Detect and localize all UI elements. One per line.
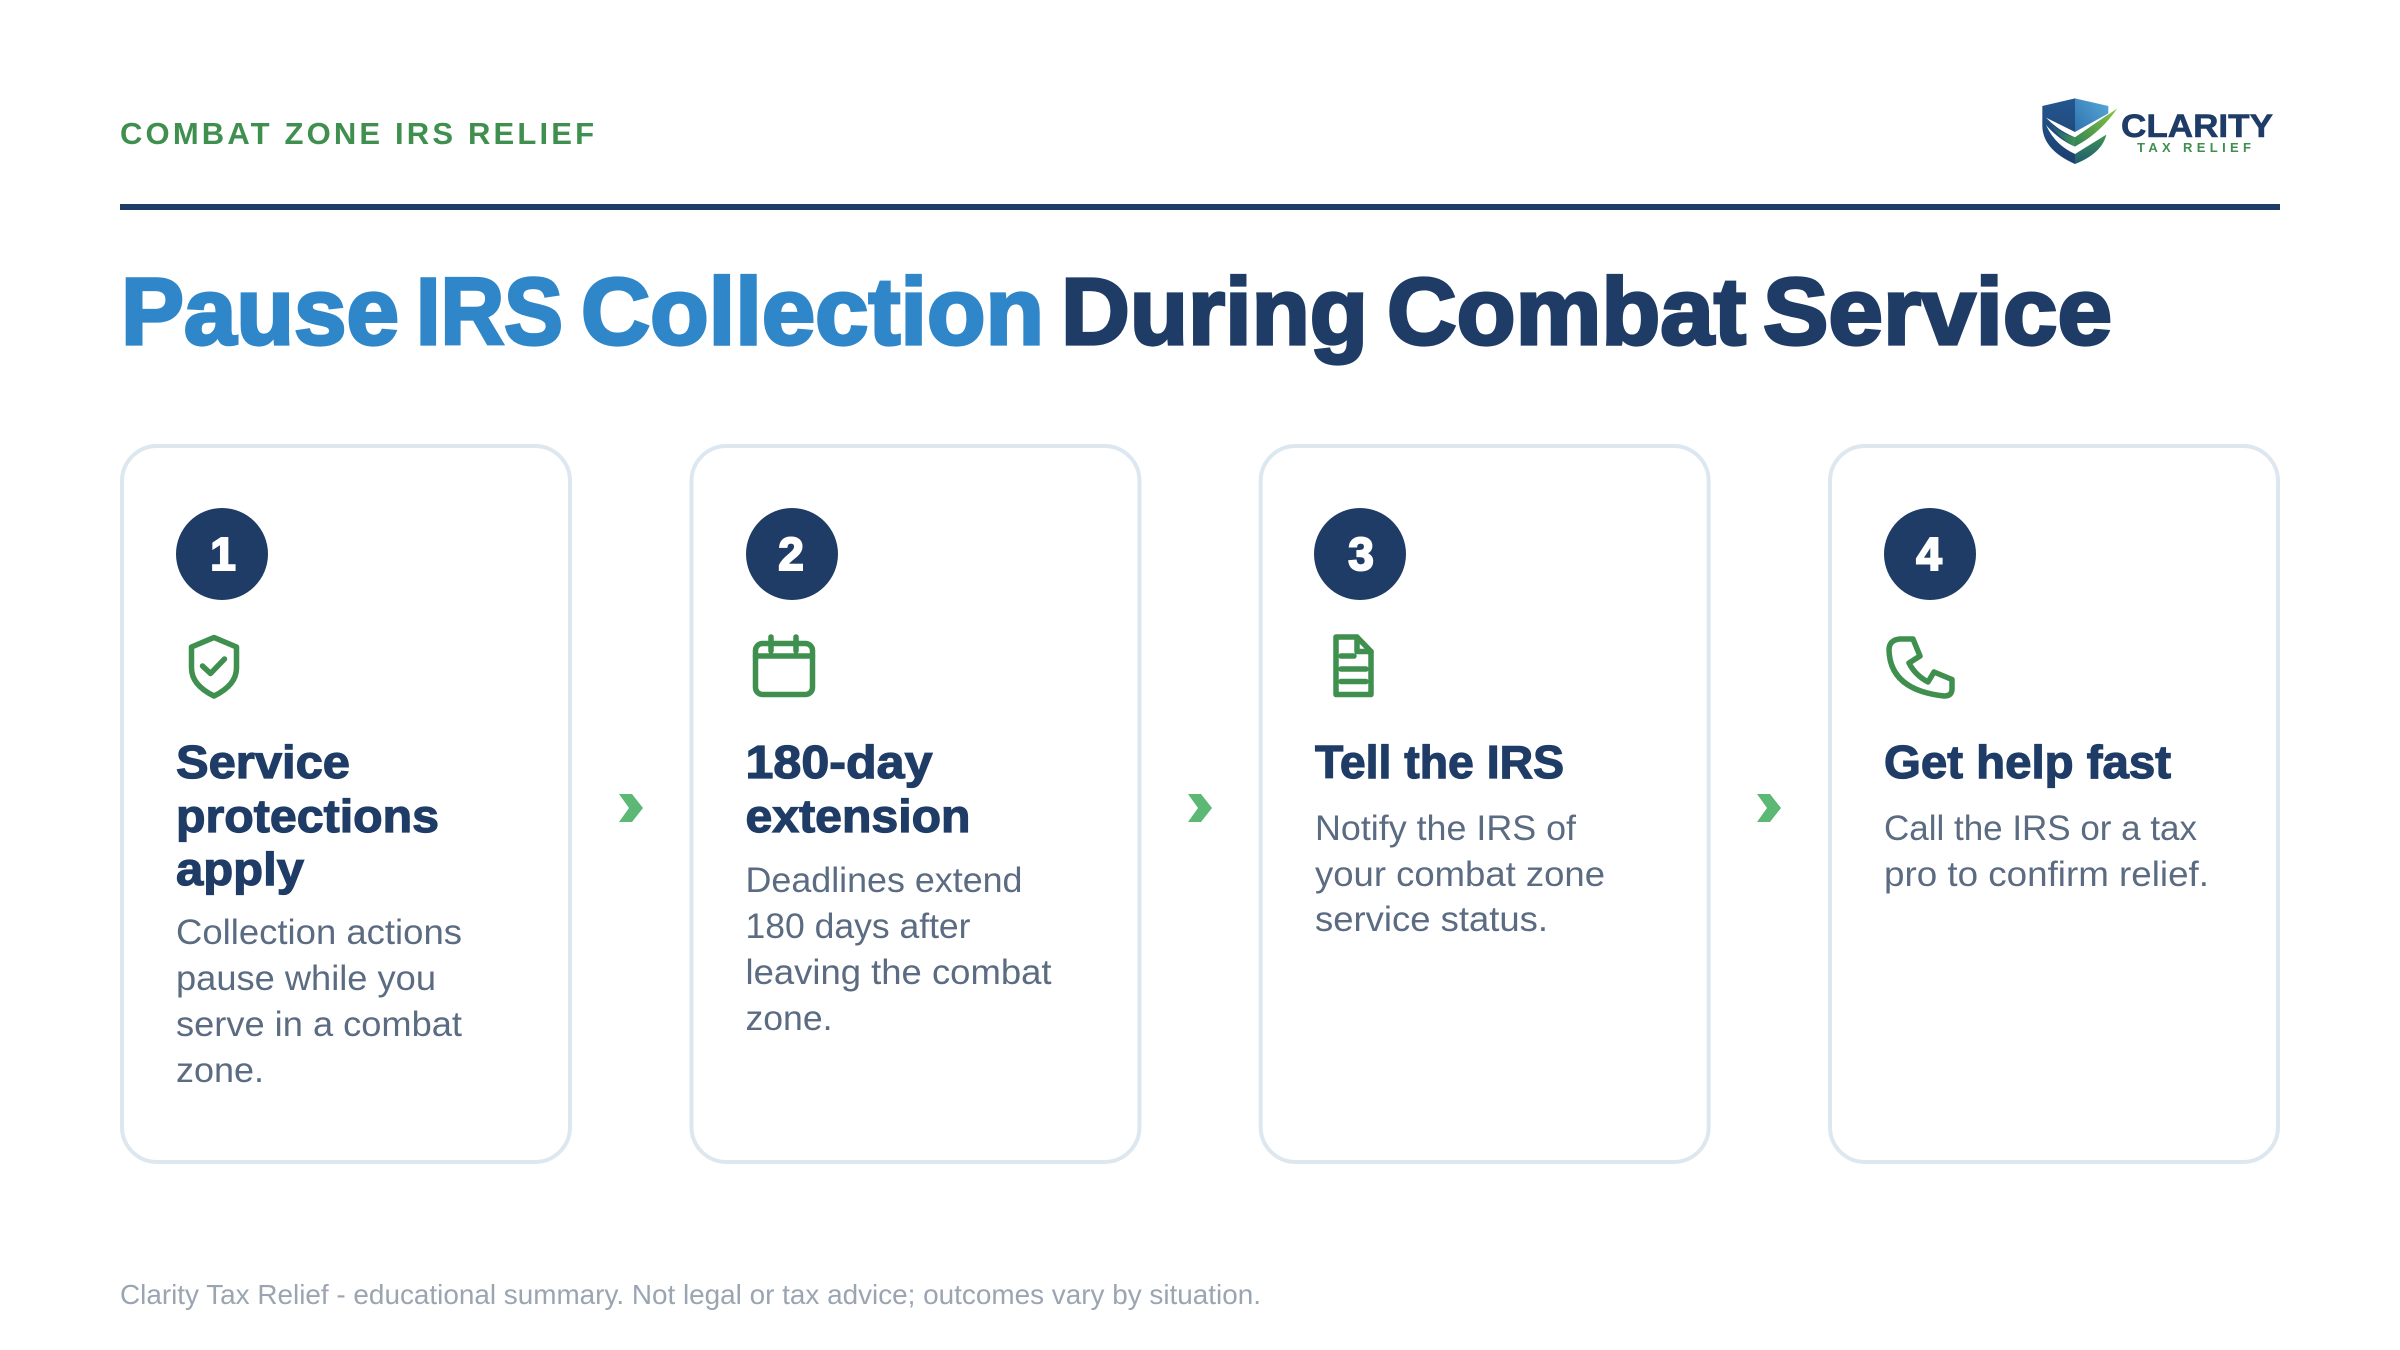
step 2 body: 180 days after [746, 907, 971, 946]
step 2 body: Deadlines extend [746, 861, 1022, 900]
number badge 4: 4 [1916, 528, 1942, 580]
icon: phone [1889, 639, 1952, 696]
step 2 body: zone. [746, 999, 832, 1038]
step 4 body: Call the IRS or a tax [1884, 809, 2197, 848]
step 2 heading [746, 736, 970, 842]
number badge 3 [1314, 508, 1406, 600]
header rule [120, 204, 2280, 210]
step 1 heading: apply [176, 843, 304, 895]
icon: document [1336, 637, 1371, 694]
logo wordmark: CLARITY [2121, 108, 2273, 144]
step 1 body: zone. [176, 1051, 264, 1090]
title: navy part: Combat [1387, 259, 1746, 365]
panel: step 1 [122, 446, 570, 1162]
icon: calendar [756, 637, 812, 694]
logo tagline: TAX RELIEF [2137, 140, 2251, 155]
step 1 body: pause while you [176, 959, 436, 998]
arrow 3 [1757, 794, 1781, 822]
step 1 heading: Service [176, 736, 350, 788]
number badge 1 [176, 508, 268, 600]
logo [2042, 98, 2273, 164]
eyebrow label: COMBAT ZONE IRS RELIEF [120, 116, 594, 151]
icon: shield check [192, 638, 236, 696]
title: blue part [121, 259, 1044, 365]
step 2 body: leaving the combat [746, 953, 1052, 992]
step 2 body [746, 861, 1052, 1038]
panel: step 4 [1830, 446, 2278, 1162]
number badge 3: 3 [1348, 528, 1374, 580]
number badge 2: 2 [778, 528, 804, 580]
panel: step 3 [1261, 446, 1709, 1162]
title: blue part: Pause [121, 259, 399, 365]
step 3 heading: Tell the IRS [1315, 736, 1564, 788]
title: navy part: During [1061, 259, 1368, 365]
title: blue part: Collection [581, 259, 1044, 365]
title: blue part: IRS [416, 259, 563, 365]
step 3 body: your combat zone [1315, 855, 1605, 894]
number badge 2 [746, 508, 838, 600]
step 1 heading: protections [176, 790, 439, 842]
title: navy part [1061, 259, 2112, 365]
step 1 heading [176, 736, 439, 895]
step 2 heading: extension [746, 790, 970, 842]
arrow 1 [619, 794, 643, 822]
logo shield [2042, 98, 2117, 164]
title: navy part: Service [1763, 259, 2112, 365]
title [121, 259, 2112, 365]
step 1 body: Collection actions [176, 913, 462, 952]
step 4 body [1884, 809, 2209, 894]
panel: step 2 [692, 446, 1140, 1162]
step 3 body: Notify the IRS of [1315, 809, 1576, 848]
number badge 4 [1884, 508, 1976, 600]
step 3 body [1315, 809, 1605, 939]
footer disclaimer: Clarity Tax Relief - educational summary. Not legal or tax advice; outcomes vary by situation. [120, 1279, 1261, 1310]
number badge 1: 1 [210, 528, 236, 580]
step 1 body: serve in a combat [176, 1005, 462, 1044]
step 1 body [176, 913, 462, 1090]
step 4 body: pro to confirm relief. [1884, 855, 2209, 894]
step 4 heading: Get help fast [1884, 736, 2171, 788]
step 3 body: service status. [1315, 900, 1548, 939]
arrow 2 [1188, 794, 1212, 822]
step 2 heading: 180-day [746, 736, 933, 788]
